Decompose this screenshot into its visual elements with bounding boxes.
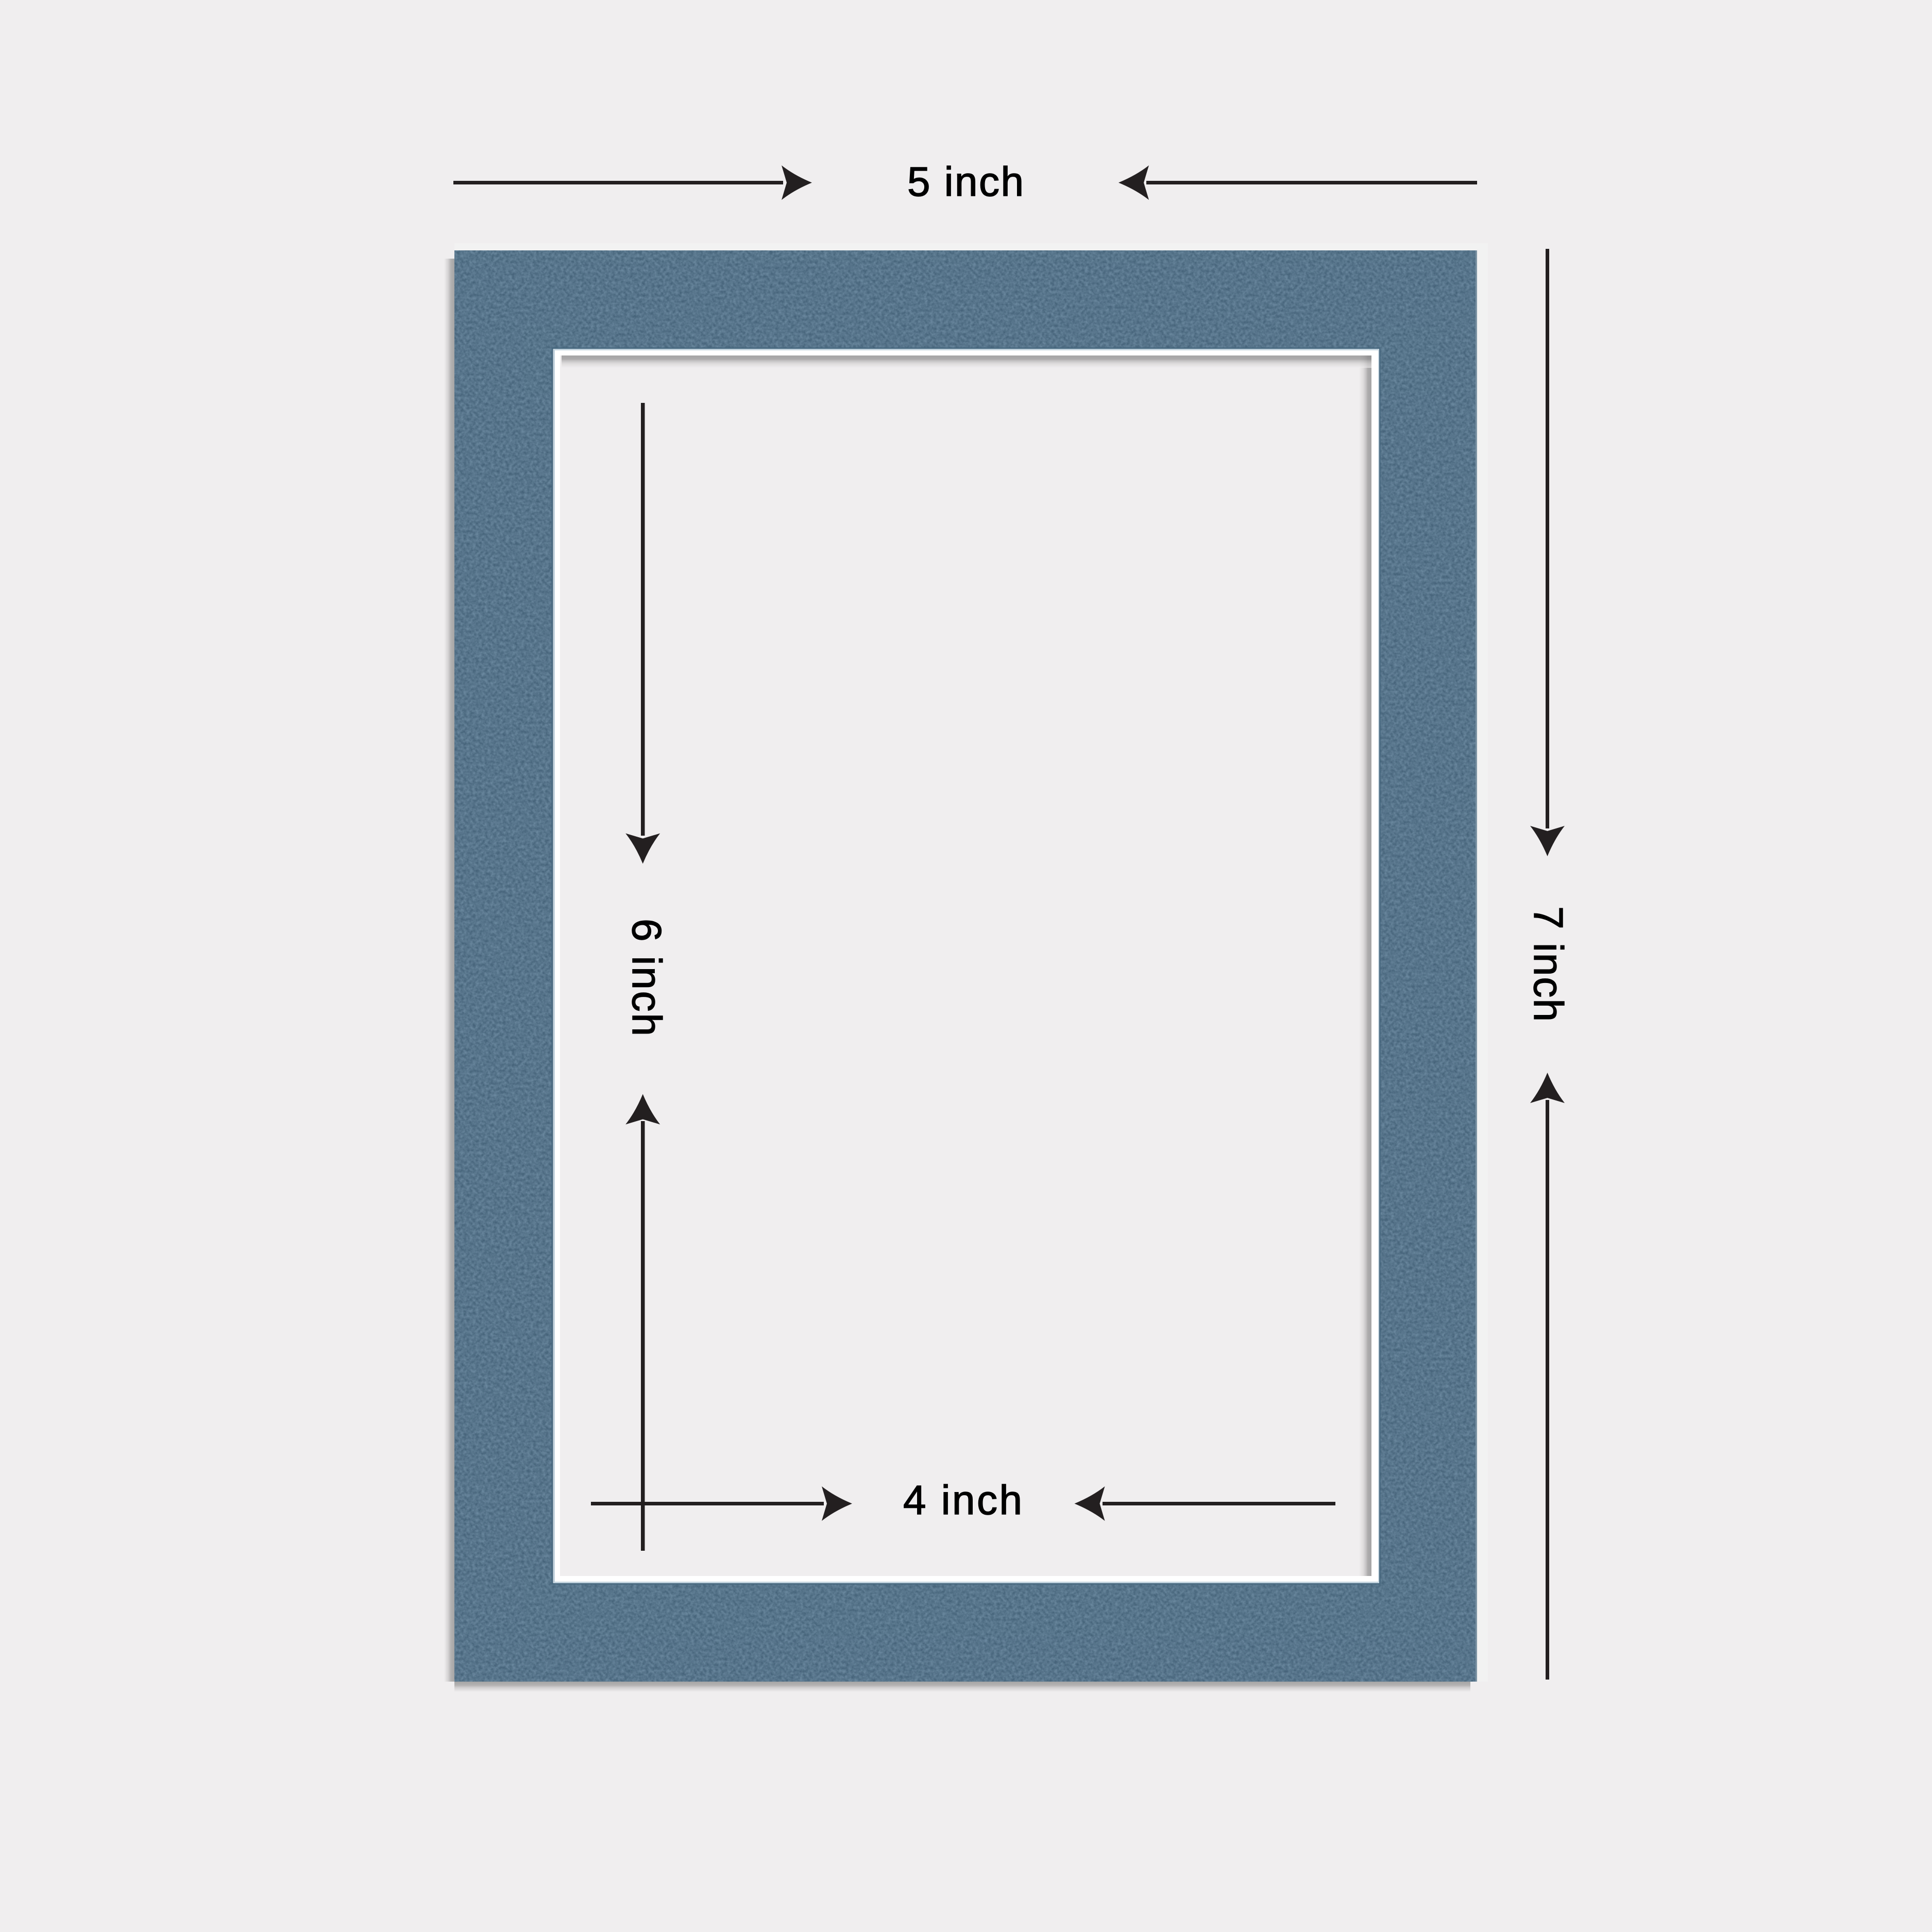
arrow: left pointing right — [591, 1486, 852, 1521]
outer drop shadow — [444, 259, 1470, 1692]
board right edge — [1476, 250, 1477, 1682]
arrow: right pointing left — [1118, 165, 1477, 200]
paper edge highlight — [454, 243, 1488, 1682]
dimension: outer width 5 inch — [453, 159, 1477, 205]
infographic canvas — [445, 165, 1565, 1691]
white bevel — [553, 349, 1379, 1583]
arrow: bottom pointing up — [1530, 1073, 1565, 1680]
blue mat board — [454, 250, 1477, 1682]
label: 4 inch: 4 inch — [903, 1477, 1022, 1523]
arrow: bottom pointing up — [625, 1094, 660, 1551]
label: 6 inch: 6 inch — [624, 919, 670, 1036]
arrow: left pointing right — [453, 165, 812, 200]
dimension: opening height 6 inch — [624, 403, 670, 1551]
arrow: right pointing left — [1075, 1486, 1335, 1521]
dimension: opening width 4 inch — [591, 1477, 1335, 1523]
arrow: top pointing down — [1530, 249, 1565, 856]
label: 5 inch: 5 inch — [907, 159, 1024, 205]
opening inner shadow — [562, 355, 1371, 1576]
dimension: outer height 7 inch — [1526, 249, 1571, 1680]
label: 7 inch: 7 inch — [1526, 906, 1571, 1022]
mat board frame — [444, 243, 1488, 1692]
bevel outer edge — [552, 348, 1380, 1584]
arrow: top pointing down — [625, 403, 660, 863]
bevel light blue edge — [553, 349, 1379, 1583]
